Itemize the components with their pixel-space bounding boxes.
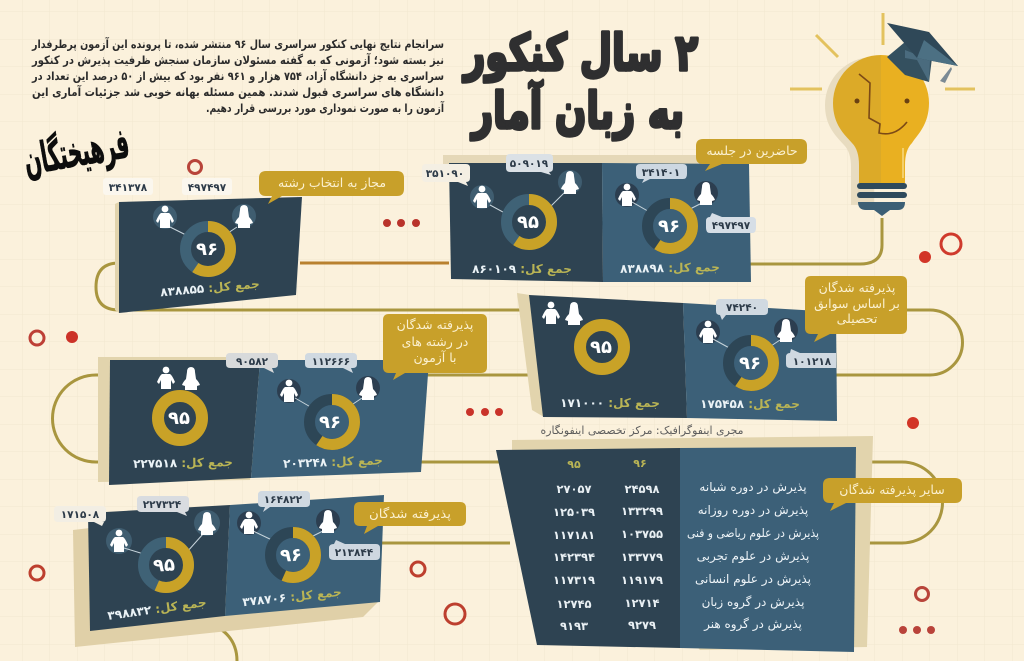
value labels: present in session: ۳۵۱۰۹۰ <box>426 168 464 180</box>
panel: eligible for field selection <box>115 197 302 313</box>
table header: ۹۶ <box>633 457 647 470</box>
value labels: present in session <box>422 154 756 233</box>
icon: light bulb with graduation cap <box>790 13 975 216</box>
value labels: admitted by academic record: ۷۴۲۴۰ <box>726 302 758 314</box>
value labels: present in session: ۳۴۱۴۰۱ <box>642 167 680 179</box>
tag: admitted by academic record: پذیرفته شدگان <box>819 280 896 296</box>
value labels: admitted in exam fields: ۹۰۵۸۲ <box>236 356 269 368</box>
panel: admitted in exam fields: جمع کل: ۲۰۳۲۴۸ <box>283 453 383 471</box>
value labels: admitted: ۲۱۳۸۴۴ <box>335 547 374 559</box>
tag: admitted by academic record: بر اساس سوابق <box>814 296 900 312</box>
connecting wire <box>52 218 962 661</box>
table rows: ۲۷۰۵۷ <box>556 482 592 496</box>
panel: admitted in exam fields: جمع کل: ۲۲۷۵۱۸ <box>133 455 233 471</box>
intro paragraph: نیز بسته شود؛ آزمونی که به گفته مسئولان سازمان سنجش ظرفیت پذیرش در کنکور <box>31 53 444 68</box>
panel: eligible for field selection: ۹۶ <box>196 239 218 260</box>
panel: admitted: جمع کل: ۳۹۸۸۳۲ <box>107 595 207 623</box>
tag: present in session: حاضرین در جلسه <box>706 143 798 159</box>
table rows: پذیرش در علوم ریاضی و فنی <box>687 526 819 541</box>
tag: present in session <box>696 139 807 171</box>
value labels: admitted by academic record <box>716 299 836 368</box>
panel: present in session: جمع کل: ۸۶۰۱۰۹ <box>472 262 572 276</box>
panel: other admitted table <box>496 436 873 652</box>
tag: admitted in exam fields: در رشته های <box>402 334 468 350</box>
panel: admitted: ۹۶ <box>280 544 303 567</box>
value labels: admitted: ۱۷۱۵۰۸ <box>61 509 100 521</box>
table rows: ۹۲۷۹ <box>628 618 656 632</box>
intro paragraph: سراسری به جز دانشگاه آزاد، ۷۵۴ هزار و ۹۶۱ نفر بود که بیش از ۵۰ درصد این تعداد در <box>31 69 444 84</box>
value labels: eligible for field selection: ۳۴۱۳۷۸ <box>109 182 148 194</box>
value labels: present in session: ۴۹۷۴۹۷ <box>712 220 751 232</box>
table rows: ۱۲۷۱۴ <box>624 596 660 610</box>
table rows: ۱۲۵۰۳۹ <box>553 505 595 519</box>
intro paragraph <box>31 37 445 116</box>
table rows: ۱۲۷۴۵ <box>556 597 592 611</box>
credit line: مجری اینفوگرافیک: مرکز تخصصی اینفونگاره <box>540 424 744 437</box>
title <box>462 24 698 140</box>
tag: admitted in exam fields <box>383 314 487 380</box>
panel: admitted in exam fields: ۹۶ <box>319 412 341 433</box>
table rows: پذیرش در علوم تجربی <box>697 549 809 564</box>
table rows: پذیرش در علوم انسانی <box>695 572 811 587</box>
value labels: eligible for field selection: ۴۹۷۴۹۷ <box>188 182 227 194</box>
table rows: پذیرش در دوره روزانه <box>698 503 808 518</box>
table rows: ۱۳۳۷۷۹ <box>621 550 663 564</box>
tag: eligible for field selection <box>259 171 404 204</box>
table rows: ۱۱۷۳۱۹ <box>553 573 595 587</box>
value labels: admitted by academic record: ۱۰۱۲۱۸ <box>793 356 832 368</box>
table rows: پذیرش در گروه هنر <box>703 617 802 632</box>
panel: present in session: ۹۵ <box>517 212 539 233</box>
table rows <box>553 480 819 633</box>
tag: admitted in exam fields: با آزمون <box>413 350 457 366</box>
intro paragraph: آزمون را به صورت نموداری مورد بررسی قرار دهیم. <box>206 101 445 116</box>
value labels: admitted: ۲۲۷۳۲۴ <box>143 499 182 511</box>
panel: admitted by academic record: ۹۵ <box>590 337 612 358</box>
tag: admitted by academic record <box>805 276 907 342</box>
table rows: پذیرش در گروه زبان <box>702 595 804 610</box>
table rows: ۹۱۹۳ <box>560 619 588 633</box>
tag: other admitted <box>823 478 962 511</box>
value labels: admitted <box>54 491 380 560</box>
panel: admitted in exam fields <box>98 357 429 485</box>
decorative red circles <box>30 160 961 634</box>
tag: admitted by academic record: تحصیلی <box>837 311 878 326</box>
table header: ۹۵ <box>567 458 581 471</box>
table rows: ۱۳۳۲۹۹ <box>621 504 663 518</box>
tag: other admitted: سایر پذیرفته شدگان <box>839 482 945 498</box>
table rows: ۱۰۳۷۵۵ <box>621 527 663 541</box>
panel: admitted: ۹۵ <box>153 554 176 577</box>
panel: admitted by academic record <box>517 293 837 421</box>
panel: present in session <box>443 155 751 282</box>
table rows: ۲۴۵۹۸ <box>624 482 660 496</box>
tag: admitted: پذیرفته شدگان <box>369 506 452 522</box>
value labels: present in session: ۵۰۹۰۱۹ <box>510 158 549 170</box>
panel: admitted in exam fields: ۹۵ <box>168 408 190 429</box>
table rows: ۱۱۹۱۷۹ <box>621 573 663 587</box>
panel: admitted by academic record: جمع کل: ۱۷۵۴۵۸ <box>700 397 800 411</box>
panel: eligible for field selection: جمع کل: ۸۳۸۸۵۵ <box>160 277 260 299</box>
intro paragraph: سرانجام نتایج نهایی کنکور سراسری سال ۹۶ منتشر شده، تا پرونده این آزمون پرطرفدار <box>31 37 444 52</box>
tag: admitted in exam fields: پذیرفته شدگان <box>397 317 474 333</box>
panel: admitted by academic record: جمع کل: ۱۷۱۰۰۰ <box>560 396 660 410</box>
table rows: ۱۴۲۳۹۴ <box>553 550 595 564</box>
title: ۲ سال کنکور <box>462 24 698 83</box>
title: به زبان آمار <box>470 80 684 140</box>
value labels: admitted in exam fields: ۱۱۲۶۶۶ <box>312 356 350 368</box>
value labels: admitted in exam fields <box>226 353 357 373</box>
value labels: admitted: ۱۶۴۸۲۲ <box>264 494 303 506</box>
panel: admitted by academic record: ۹۶ <box>739 353 761 374</box>
tag: eligible for field selection: مجاز به انتخاب رشته <box>278 175 386 191</box>
value labels: eligible for field selection <box>103 178 232 195</box>
table header <box>567 457 647 471</box>
panel: admitted: جمع کل: ۳۷۸۷۰۶ <box>242 585 342 609</box>
table rows: ۱۱۷۱۸۱ <box>553 528 595 542</box>
intro paragraph: دانشگاه های سراسری قبول شدند. همین مسئله بهانه خوبی شد جزئیات آماری این <box>32 85 444 100</box>
table rows: پذیرش در دوره شبانه <box>699 480 807 495</box>
tag: admitted <box>354 502 466 534</box>
panel: admitted <box>73 495 384 647</box>
panel: present in session: ۹۶ <box>658 216 680 237</box>
panel: present in session: جمع کل: ۸۳۸۸۹۸ <box>620 260 720 276</box>
text: فرهیختگان <box>20 118 133 186</box>
